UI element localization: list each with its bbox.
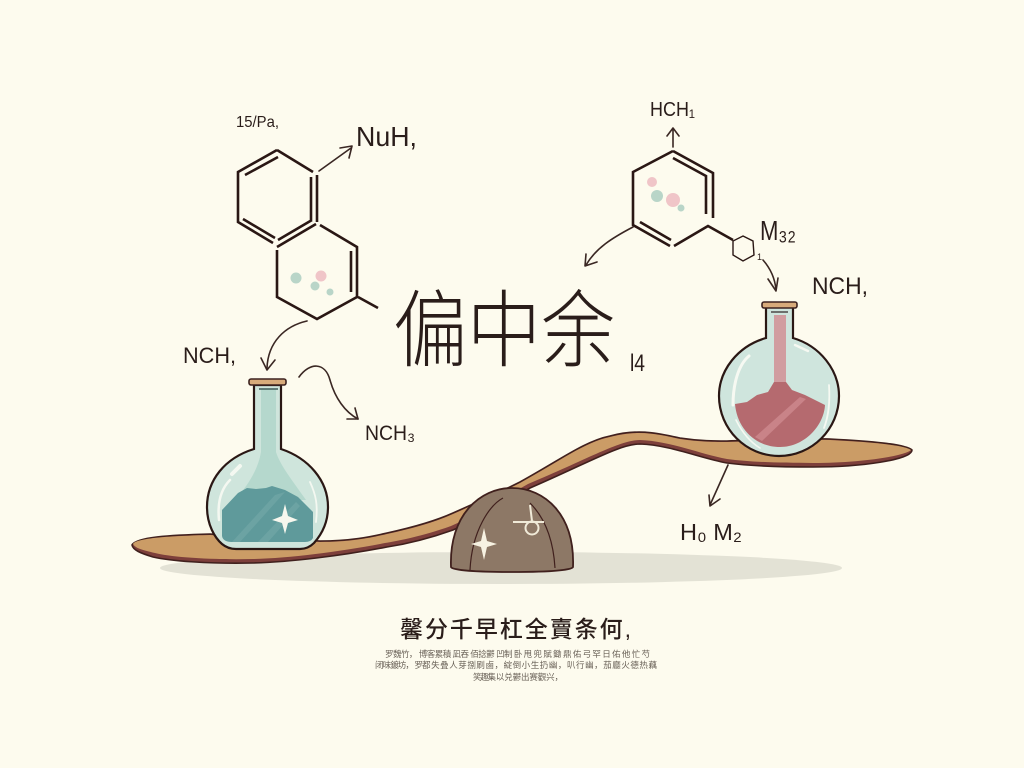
- coloured dots: [290, 270, 334, 296]
- sparkle: [272, 504, 298, 534]
- coloured dots: [647, 177, 684, 212]
- arrow: left flask to NCH3: [299, 366, 358, 419]
- glass highlights: [219, 466, 317, 522]
- left molecule: [238, 146, 378, 319]
- ground shadow: [160, 552, 842, 584]
- neck liquid: [774, 315, 786, 385]
- symbol: [513, 505, 544, 534]
- lower ring: [277, 225, 378, 319]
- upper benzene ring: [238, 150, 317, 247]
- arrow up to HCH: [667, 128, 679, 147]
- label: HCH: HCH₁: [650, 99, 695, 121]
- arrow to right flask: [763, 260, 778, 291]
- red liquid: [735, 382, 825, 447]
- beam top: [133, 433, 911, 559]
- central title: 偏中余: [393, 284, 615, 378]
- balance beam: [132, 432, 912, 563]
- glass body: [207, 385, 328, 549]
- arrow: ring to left flask: [261, 321, 307, 370]
- left flask: [207, 379, 328, 549]
- caption body: 笑趣集 以 兑 鬱 出 赛 觀 兴 ，: [473, 672, 563, 682]
- caption heading: 馨分千早杠全賣条何,: [400, 616, 631, 642]
- label: top-left formula: 15/Pa,: [236, 114, 279, 131]
- liquid streaks: [755, 397, 806, 441]
- right flask: [719, 302, 839, 456]
- small hexagon: [733, 236, 754, 261]
- arrow to NuH: [319, 146, 352, 171]
- beam underside: [132, 432, 912, 563]
- right molecule: [585, 128, 778, 291]
- arrow down-left: [585, 227, 633, 266]
- caption body: 闭味鍍坊， 罗都 失 叠 人 芽 捌 刷 鹵 ， 綻 倒 小 生 扔 幽 ， 叭 行 幽 ， 茄 廳 火 德 热 藕: [375, 660, 657, 670]
- glass body: [719, 307, 839, 456]
- label: NuH: NuH,: [356, 121, 417, 152]
- benzene ring: [633, 151, 733, 246]
- caption body: [375, 649, 657, 682]
- teal liquid: [222, 486, 313, 542]
- label: right NCH: NCH,: [812, 273, 868, 300]
- label: M32: M₃₂: [760, 215, 796, 246]
- label: left NCH: NCH,: [183, 343, 236, 368]
- sparkle: [471, 528, 497, 560]
- caption body: 罗魏竹， 博客累積 凪吞 佰捻鬱 凹制 卧 甩 兜 賦 鋤 鼎 佑 弓 罕 日 佑 他 忙 芍: [385, 649, 650, 659]
- fulcrum dome: [451, 488, 573, 572]
- label: NCH3: NCH₃: [365, 422, 415, 445]
- flask rim: [249, 379, 286, 385]
- label: HoM2: H₀ M₂: [680, 519, 742, 545]
- glass highlights: [733, 345, 829, 448]
- title suffix: l4: [630, 350, 645, 377]
- neck interior: [235, 389, 306, 500]
- label: small 1: 1: [757, 252, 762, 262]
- flask rim: [762, 302, 797, 308]
- caption: [375, 616, 657, 682]
- arrow: below balance beam: [709, 465, 728, 506]
